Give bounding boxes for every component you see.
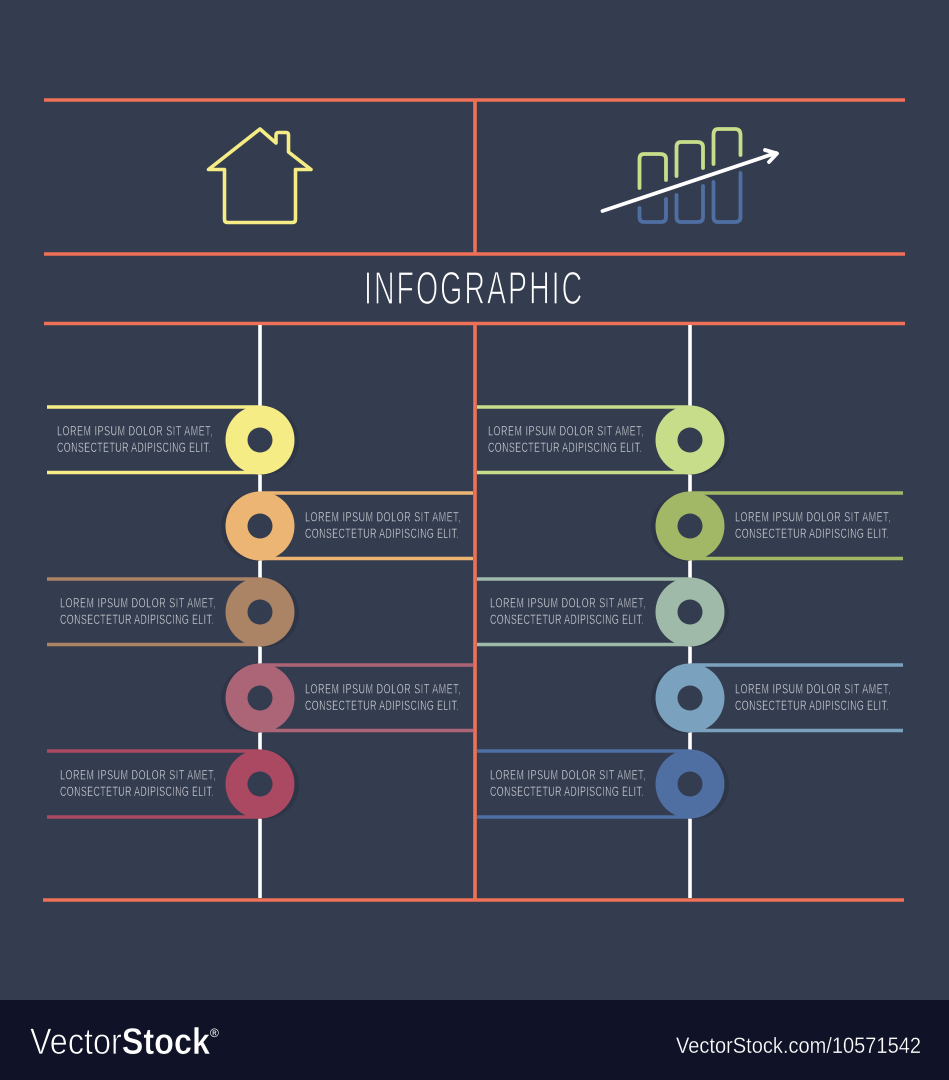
item: right column row 3: CONSECTETUR ADIPISCING ELIT. (490, 613, 644, 628)
item: right column row 5: CONSECTETUR ADIPISCING ELIT. (490, 785, 644, 800)
footer reference: VectorStock.com/10571542 (676, 1033, 921, 1058)
item: left column row 2 (221, 492, 473, 561)
item: left column row 3 (47, 578, 299, 647)
item: right column row 1: CONSECTETUR ADIPISCING ELIT. (488, 441, 642, 456)
item: left column row 5 (47, 750, 299, 819)
item: left column row 1: LOREM IPSUM DOLOR SIT AMET, (57, 425, 213, 439)
item: right column row 2: LOREM IPSUM DOLOR SIT AMET, (735, 511, 891, 525)
item: right column row 1 (477, 406, 729, 475)
item: right column row 4: LOREM IPSUM DOLOR SIT AMET, (735, 683, 891, 697)
item: left column row 4 (221, 664, 473, 733)
timeline spines (260, 325, 690, 898)
item: left column row 2: LOREM IPSUM DOLOR SIT AMET, (305, 511, 461, 525)
icon: house (208, 129, 311, 222)
item: left column row 4: CONSECTETUR ADIPISCING ELIT. (305, 699, 459, 714)
icon: bar chart with arrow (602, 129, 777, 222)
item: left column row 3: LOREM IPSUM DOLOR SIT AMET, (60, 597, 216, 611)
item: right column row 3 (477, 578, 729, 647)
item: right column row 5 (477, 750, 729, 819)
item: right column row 4 (651, 664, 903, 733)
item: right column row 3: LOREM IPSUM DOLOR SIT AMET, (490, 597, 646, 611)
item: left column row 4: LOREM IPSUM DOLOR SIT AMET, (305, 683, 461, 697)
item: left column row 2: CONSECTETUR ADIPISCING ELIT. (305, 527, 459, 542)
item: left column row 5: CONSECTETUR ADIPISCING ELIT. (60, 785, 214, 800)
registered mark: ® (210, 1026, 219, 1040)
item: right column row 5: LOREM IPSUM DOLOR SIT AMET, (490, 769, 646, 783)
title: INFOGRAPHIC (364, 263, 582, 315)
item: right column row 2 (651, 492, 903, 561)
item: left column row 1 (47, 406, 299, 475)
item: left column row 1: CONSECTETUR ADIPISCING ELIT. (57, 441, 211, 456)
footer logo: VectorStock (30, 1021, 210, 1062)
item: right column row 2: CONSECTETUR ADIPISCING ELIT. (735, 527, 889, 542)
footer bar (0, 1000, 949, 1080)
item: right column row 4: CONSECTETUR ADIPISCING ELIT. (735, 699, 889, 714)
item: left column row 3: CONSECTETUR ADIPISCING ELIT. (60, 613, 214, 628)
item: left column row 5: LOREM IPSUM DOLOR SIT AMET, (60, 769, 216, 783)
frame lines (43, 100, 905, 900)
item: right column row 1: LOREM IPSUM DOLOR SIT AMET, (488, 425, 644, 439)
